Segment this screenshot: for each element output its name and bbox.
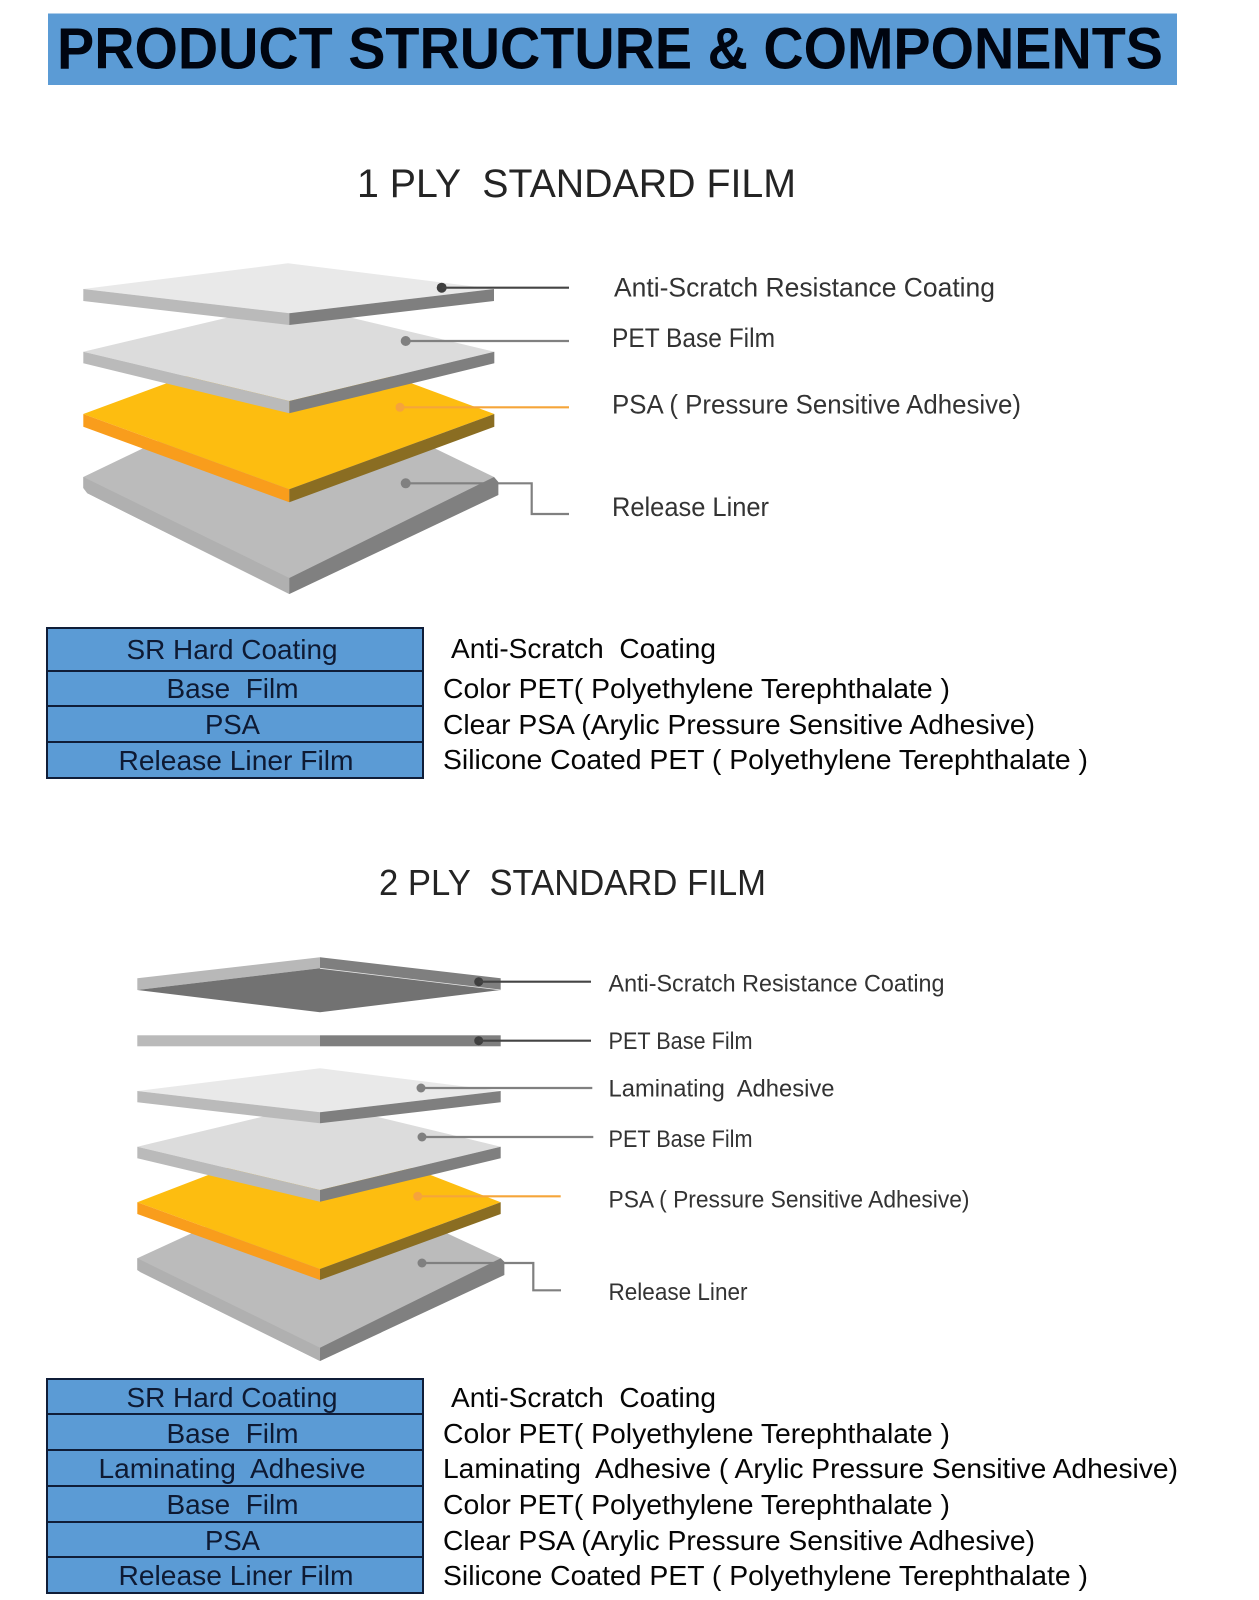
table: 2 ply component names: Base Film [166, 1418, 298, 1449]
layer: anti-scratch coating seen from below [137, 957, 501, 1012]
labels: 2 ply layers: PET Base Film [608, 1028, 752, 1055]
leader: PET base film [474, 1036, 591, 1045]
table: 2 ply component names: PSA [205, 1525, 260, 1556]
table: 2 ply component names: Release Liner Film [118, 1560, 354, 1591]
leader: release liner [401, 478, 569, 514]
descriptions: 1 ply materials: Color PET( Polyethylene Terephthalate ) [443, 673, 950, 704]
layer: PET base film [137, 1103, 501, 1202]
labels: 1 ply layers: Anti-Scratch Resistance Coating [614, 272, 995, 302]
table: 1 ply component names: PSA [205, 709, 260, 740]
descriptions: 1 ply materials: Silicone Coated PET ( Polyethylene Terephthalate ) [443, 744, 1088, 775]
layer: PET base film [83, 303, 494, 413]
layer: PSA [137, 1132, 501, 1280]
descriptions: 2 ply materials: Color PET( Polyethylene Terephthalate ) [443, 1418, 950, 1449]
layer: laminating adhesive [137, 1068, 501, 1123]
labels: 2 ply layers: Anti-Scratch Resistance Coating [608, 970, 944, 998]
table: 2 ply component names [47, 1379, 423, 1593]
labels: 2 ply layers [608, 970, 970, 1306]
descriptions: 2 ply materials: Silicone Coated PET ( Polyethylene Terephthalate ) [443, 1560, 1088, 1591]
leader: PSA [413, 1192, 561, 1201]
diagram: 1 ply layer stack [83, 263, 569, 594]
leader: second PET base film [418, 1132, 593, 1142]
descriptions: 2 ply materials: Anti-Scratch Coating [451, 1382, 716, 1413]
descriptions: 1 ply materials: Anti-Scratch Coating [451, 633, 716, 664]
diagram: 2 ply layer stack [137, 957, 593, 1361]
title banner: PRODUCT STRUCTURE & COMPONENTS [57, 16, 1163, 82]
table: 1 ply component names: Base Film [166, 673, 298, 704]
table: 2 ply component names: Laminating Adhesive [98, 1453, 366, 1484]
labels: 1 ply layers: Release Liner [612, 492, 769, 522]
table: 2 ply component names: Base Film [166, 1489, 298, 1520]
descriptions: 1 ply materials: Clear PSA (Arylic Pressure Sensitive Adhesive) [443, 709, 1035, 740]
labels: 1 ply layers: PSA ( Pressure Sensitive Adhesive) [612, 390, 1021, 420]
layer: release liner [83, 378, 498, 594]
leader: PSA [396, 403, 569, 412]
labels: 1 ply layers: PET Base Film [612, 323, 775, 353]
heading: 1 ply standard film: 1 PLY STANDARD FILM [357, 162, 796, 206]
labels: 2 ply layers: PSA ( Pressure Sensitive Adhesive) [608, 1186, 970, 1214]
descriptions: 2 ply materials: Clear PSA (Arylic Pressure Sensitive Adhesive) [443, 1525, 1035, 1556]
leader: anti-scratch coating [437, 283, 569, 293]
table: 1 ply component names: Release Liner Film [118, 745, 354, 776]
table: 1 ply component names: SR Hard Coating [126, 634, 338, 665]
layer: anti-scratch coating [83, 263, 494, 325]
descriptions: 1 ply materials [443, 633, 1088, 775]
descriptions: 2 ply materials: Color PET( Polyethylene Terephthalate ) [443, 1489, 950, 1520]
layer: PET base film edge-on [137, 1035, 501, 1046]
leader: anti-scratch coating [474, 977, 591, 986]
labels: 2 ply layers: Laminating Adhesive [608, 1076, 834, 1102]
layer: PSA [83, 338, 494, 502]
leader: PET base film [401, 336, 569, 346]
layer: release liner [137, 1174, 504, 1361]
labels: 2 ply layers: Release Liner [608, 1279, 748, 1306]
descriptions: 2 ply materials [443, 1382, 1178, 1591]
leader: laminating adhesive [416, 1084, 592, 1092]
labels: 2 ply layers: PET Base Film [608, 1126, 752, 1153]
table: 1 ply component names [47, 628, 423, 778]
heading: 2 ply standard film: 2 PLY STANDARD FILM [379, 862, 766, 903]
leader: release liner [418, 1258, 561, 1290]
labels: 1 ply layers [612, 272, 1021, 522]
table: 2 ply component names: SR Hard Coating [126, 1382, 338, 1413]
descriptions: 2 ply materials: Laminating Adhesive ( Arylic Pressure Sensitive Adhesive) [443, 1453, 1178, 1484]
